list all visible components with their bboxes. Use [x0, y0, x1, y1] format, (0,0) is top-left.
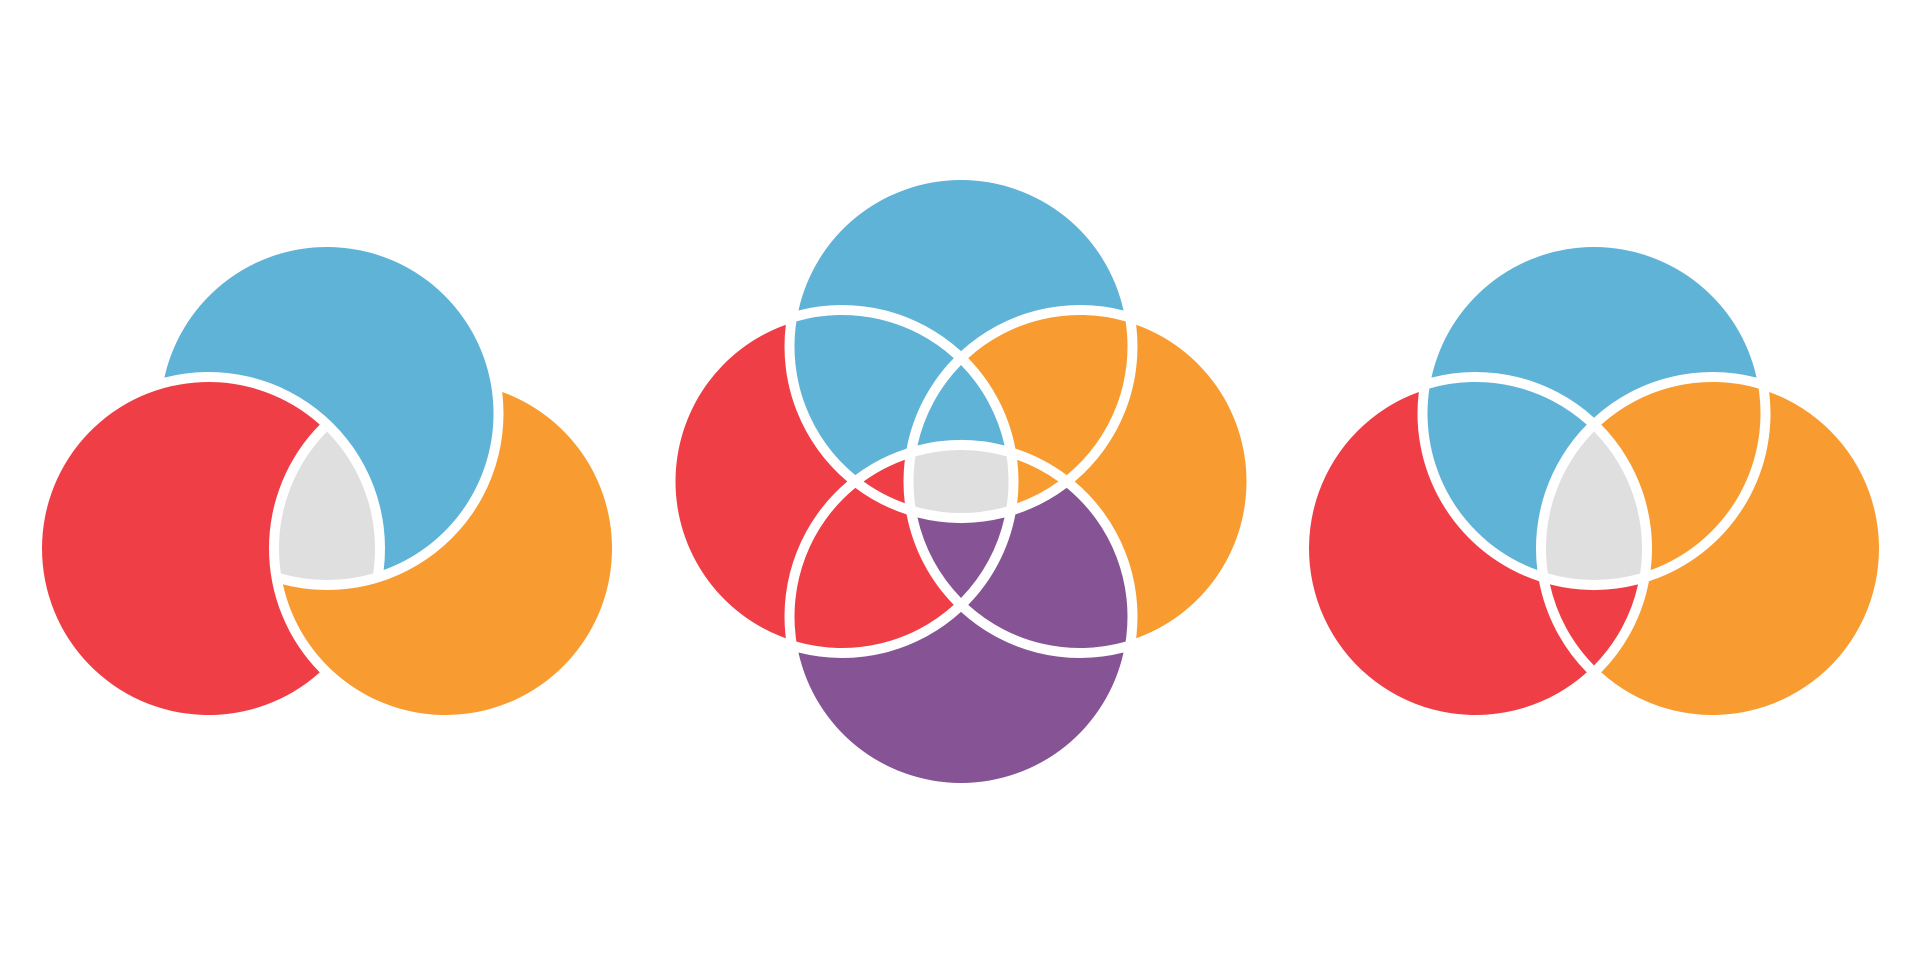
region: blue top circle	[1431, 247, 1757, 418]
diagram: four-circle venn	[676, 180, 1246, 783]
circle: orange bottom right	[283, 392, 612, 715]
region: purple lower-center overlap	[917, 518, 1005, 598]
region: orange right lens	[1601, 382, 1760, 570]
circle: red bottom left	[42, 382, 320, 715]
region: red left circle	[676, 325, 847, 638]
region: blue upper-center overlap	[917, 365, 1005, 445]
diagram: interlocking three-circle venn	[42, 247, 612, 715]
center overlap: grey	[914, 450, 1008, 513]
region: purple bottom circle	[798, 612, 1124, 783]
region: red lower-left lens	[795, 488, 954, 648]
region: orange right circle	[1601, 392, 1879, 715]
center overlap: grey	[279, 432, 375, 580]
region: orange upper-right lens	[968, 315, 1127, 475]
region: blue upper-left lens	[795, 315, 954, 475]
region: blue left lens	[1428, 382, 1587, 570]
region: blue top circle	[798, 180, 1124, 351]
region: red bottom lens	[1550, 584, 1638, 665]
region: red left circle	[1309, 392, 1587, 715]
region: orange right circle	[1075, 325, 1246, 638]
region: purple lower-right lens	[968, 488, 1127, 648]
region: orange right sliver	[1017, 460, 1058, 503]
region: red left sliver	[864, 460, 905, 503]
diagram: three-circle venn with lenses	[1309, 247, 1879, 715]
center overlap: grey	[1546, 432, 1642, 580]
circle: blue top	[164, 247, 494, 570]
